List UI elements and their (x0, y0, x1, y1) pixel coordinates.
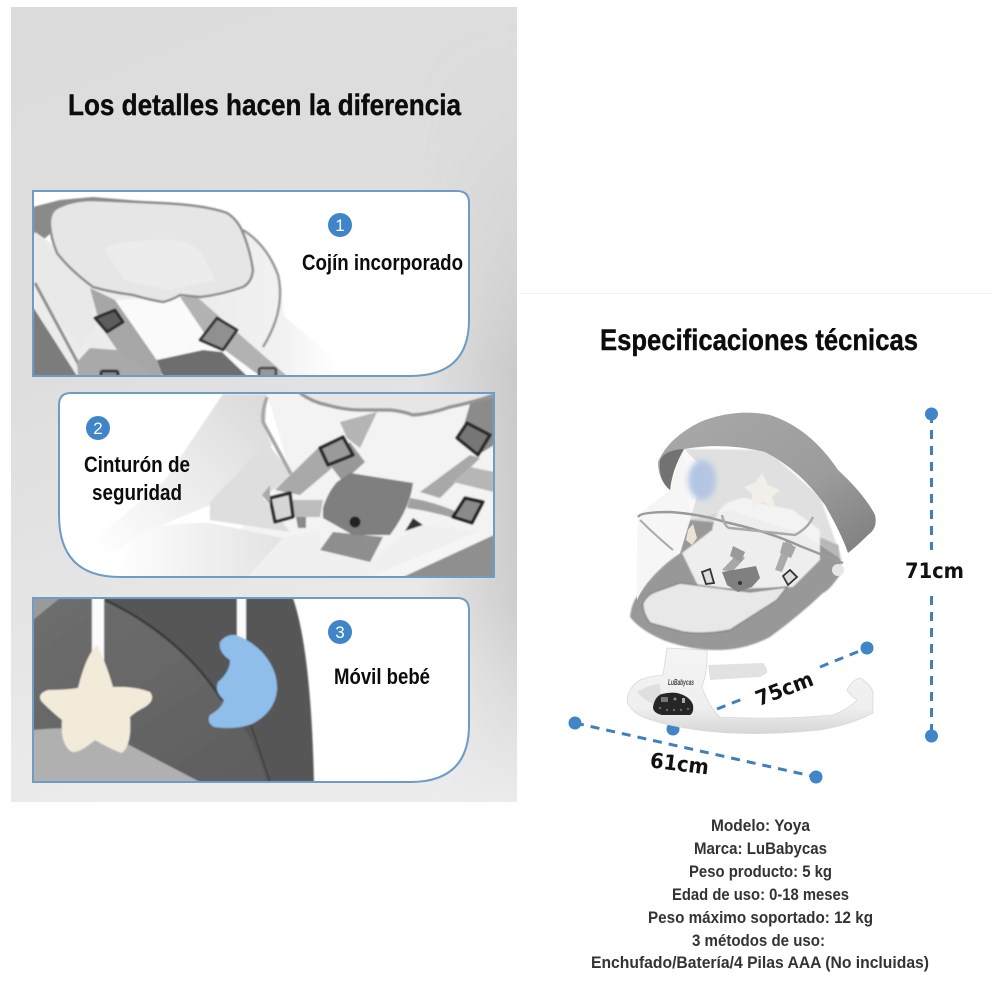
title: details: Los detalles hacen la diferencia (68, 89, 461, 122)
seat pad upper (682, 498, 820, 590)
panel border (59, 393, 494, 577)
panel border (33, 598, 469, 782)
photo: belt and buckle (130, 394, 493, 576)
line: depth (717, 648, 867, 709)
small plush (686, 524, 697, 545)
hidden dot behind base (666, 722, 680, 736)
number badge 2: 2 (93, 419, 103, 438)
label: mobile: Móvil bebé (334, 664, 430, 689)
net hoop (638, 512, 843, 563)
label: belt: seguridad (92, 480, 182, 505)
spec list: Modelo: Yoya (711, 816, 810, 835)
label: belt: Cinturón de (84, 452, 190, 477)
interior behind seat (670, 449, 842, 580)
photo: headrest and straps (34, 196, 304, 375)
spec list: 3 métodos de uso: (692, 931, 825, 950)
left background panel (11, 7, 517, 802)
label: width: 61cm (649, 748, 710, 779)
product: baby swing (627, 413, 876, 734)
canopy underside (660, 449, 684, 490)
spec list: Enchufado/Batería/4 Pilas AAA (No incluidas) (591, 953, 929, 972)
spec list: Peso producto: 5 kg (689, 862, 832, 881)
line: height (930, 414, 933, 736)
harness (702, 540, 797, 592)
mosquito net (637, 449, 705, 600)
label: belt (84, 452, 190, 505)
dots (568, 408, 938, 784)
number badge 1: 1 (335, 216, 345, 235)
spec list: Marca: LuBabycas (694, 839, 827, 858)
faint separator (520, 293, 992, 294)
seat pad lower (643, 583, 787, 633)
panel border (33, 191, 469, 376)
title: technical specifications: Especificaciones técnicas (600, 324, 918, 357)
seat shell (630, 520, 842, 650)
panel: safety belt (59, 393, 494, 577)
star toy (744, 473, 780, 507)
dimension dots and labels (568, 408, 964, 784)
base ring and column (627, 648, 873, 734)
number badge 3 (328, 620, 352, 644)
line: width (575, 723, 816, 777)
spec list: Edad de uso: 0-18 meses (672, 885, 849, 904)
panel: built-in cushion (33, 191, 469, 383)
panel: baby mobile (33, 598, 469, 782)
hinge knob (832, 564, 844, 576)
canopy (658, 413, 876, 553)
spec list: Peso máximo soportado: 12 kg (648, 908, 873, 927)
net overlay (684, 449, 842, 560)
dimension lines (575, 414, 932, 777)
label: cushion: Cojín incorporado (302, 250, 463, 275)
spec list (591, 816, 929, 972)
number badge 2 (86, 416, 110, 440)
label: height: 71cm (905, 559, 964, 583)
brand label: LuBabycas (668, 678, 694, 687)
icon: plush star (40, 645, 152, 753)
number badge 1 (328, 213, 352, 237)
control panel (653, 693, 693, 715)
icon: plush moon (209, 635, 277, 728)
number badge 3: 3 (335, 623, 345, 642)
label: depth: 75cm (752, 667, 817, 711)
moon toy (688, 460, 716, 500)
photo: mobile toys (33, 598, 314, 782)
